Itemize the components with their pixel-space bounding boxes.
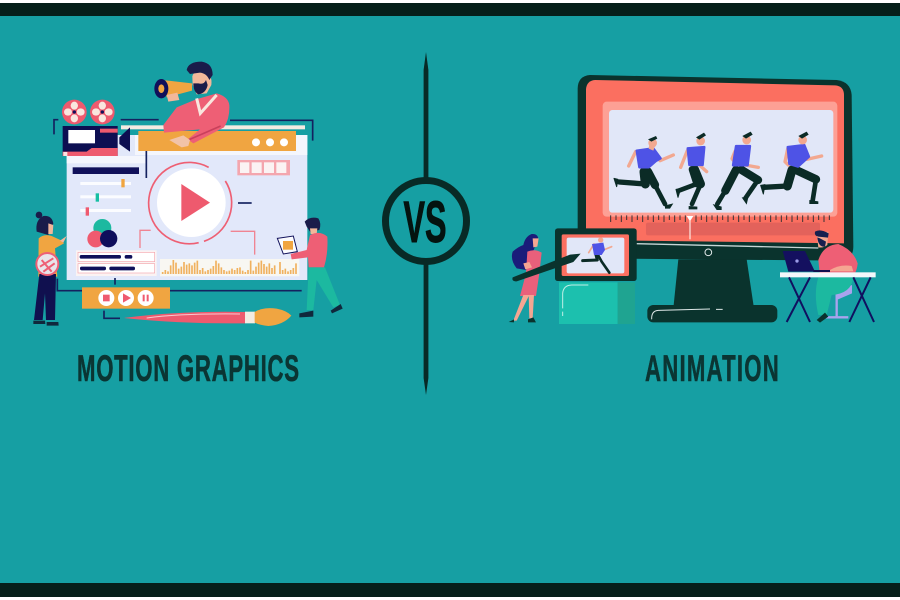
figure: man at laptop desk [780,230,876,323]
video editor window [67,125,307,280]
teal box [559,282,635,324]
figure: woman on left [33,212,67,326]
colour circles [87,219,117,247]
audio waveform [160,259,299,276]
desktop monitor [578,75,853,322]
playback controls bar [82,287,170,309]
figure: woman with stylus [509,234,581,322]
panel: motion graphics illustration [33,62,343,326]
panel: animation illustration [509,75,876,324]
figure: man with tablet [277,218,343,317]
play button with ring [149,162,232,244]
text fields [76,250,157,276]
orange title bar [138,131,296,151]
figure: man with megaphone [154,62,229,147]
top dark band [0,3,900,16]
divider line [424,52,428,395]
navy frame lines [54,120,313,318]
runner frame 3 [713,132,758,210]
runner frame 2 [676,133,707,209]
bottom dark band [0,583,900,597]
sliders panel [73,167,139,216]
icon: paintbrush [124,308,291,326]
runner frame 4 [761,132,822,204]
drawing tablet [555,228,637,281]
heading: motion graphics: MOTION GRAPHICS [77,348,299,389]
coral corner marks [140,230,255,255]
vs ring [386,180,466,262]
panel: versus divider [386,52,466,395]
vs label: VS [404,190,446,255]
film strip [237,160,290,175]
runner frame 1 [614,136,673,209]
icon: film camera [62,100,130,156]
heading: animation: ANIMATION [645,348,779,389]
